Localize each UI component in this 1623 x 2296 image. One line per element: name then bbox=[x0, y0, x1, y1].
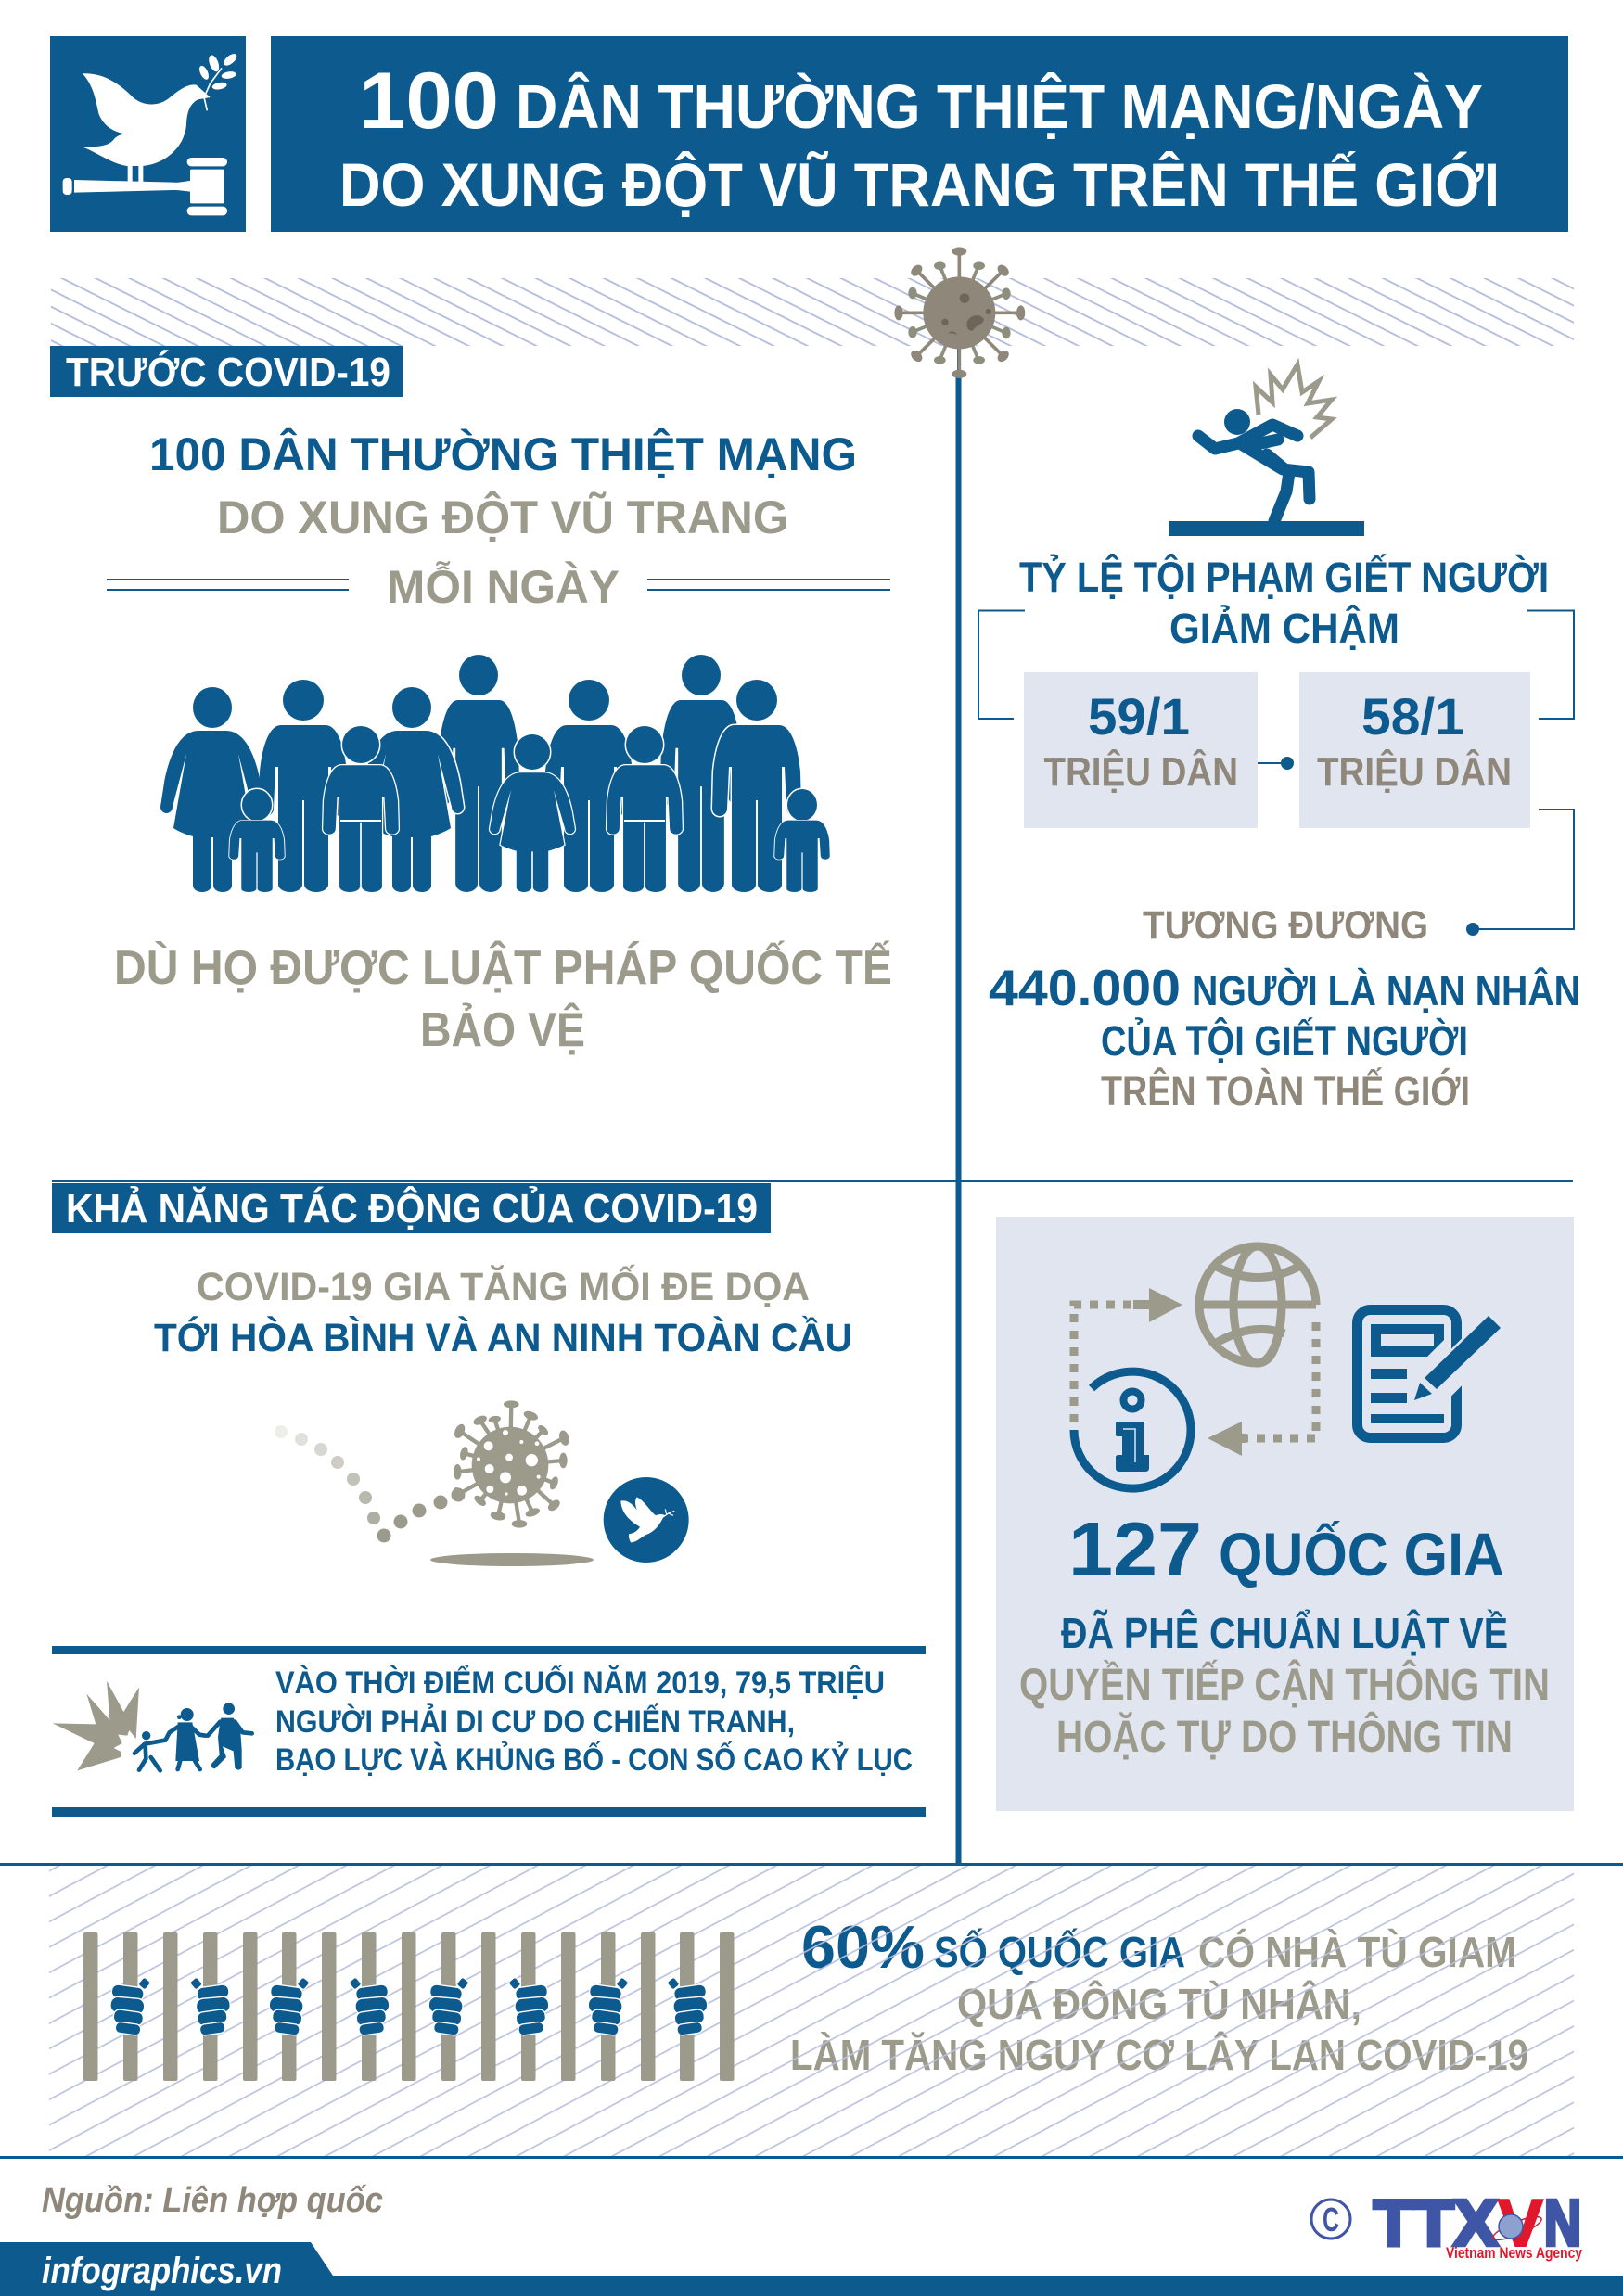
rule below prison band bbox=[0, 2156, 1623, 2159]
text: 440,000 victims bbox=[989, 903, 1580, 1115]
text: protected by international law: DÙ HỌ ĐƯỢC LUẬT PHÁP QUỐC TẾ bbox=[114, 940, 892, 995]
bracket lines bbox=[978, 610, 1574, 929]
text: 440,000 victims: 440.000 bbox=[989, 959, 1181, 1016]
stat box: 59/1: 59/1 bbox=[1088, 687, 1190, 746]
footer bar with website: infographics.vn bbox=[42, 2251, 282, 2291]
icon: person falling with impact burst bbox=[1169, 364, 1364, 536]
connector dots bbox=[1281, 757, 1479, 936]
stat box: 58/1: TRIỆU DÂN bbox=[1317, 748, 1512, 795]
bouncing dots trail bbox=[275, 1425, 466, 1543]
logo: TTXVN bbox=[1311, 2187, 1582, 2262]
logo: TTXVN: N bbox=[1544, 2187, 1581, 2259]
icon: coronavirus top bbox=[894, 247, 1025, 378]
headline: 100 civilians per day: DO XUNG ĐỘT VŨ TRANG bbox=[217, 491, 788, 543]
text: 60% of countries overcrowded prisons: CÓ NHÀ TÙ GIAM bbox=[1198, 1928, 1516, 1976]
text: 440,000 victims: TƯƠNG ĐƯƠNG bbox=[1143, 903, 1428, 948]
text: displaced people: BẠO LỰC VÀ KHỦNG BỐ - CON SỐ CAO KỶ LỤC bbox=[275, 1741, 913, 1778]
icon: prison bars bbox=[83, 1932, 735, 2081]
logo: TTXVN: C bbox=[1323, 2200, 1339, 2239]
hatched band: bottom bbox=[49, 1866, 1574, 2157]
text: protected by international law: BẢO VỆ bbox=[420, 1002, 585, 1057]
text: displaced people: NGƯỜI PHẢI DI CƯ DO CHIẾN TRANH, bbox=[275, 1704, 795, 1740]
section label: before Covid-19: TRƯỚC COVID-19 bbox=[66, 349, 390, 395]
text: 60% of countries overcrowded prisons: SỐ QUỐC GIA bbox=[934, 1928, 1185, 1976]
header icon: dove and gavel bbox=[50, 36, 246, 232]
icon: coronavirus ball bbox=[452, 1400, 570, 1528]
icon: dotted arrows bbox=[1074, 1288, 1316, 1456]
text: 127 countries: QUỐC GIA bbox=[1219, 1520, 1504, 1588]
text: Covid-19 threatens peace bbox=[154, 1264, 852, 1360]
title banner: DÂN THƯỜNG THIỆT MẠNG/NGÀY bbox=[516, 72, 1483, 142]
logo: TTXVN: TTX bbox=[1374, 2187, 1498, 2259]
headline: 100 civilians per day: MỖI NGÀY bbox=[387, 561, 620, 613]
text: displaced people bbox=[275, 1665, 913, 1778]
rule above prison band bbox=[0, 1863, 1623, 1866]
text: Covid-19 threatens peace: COVID-19 GIA TĂNG MỐI ĐE DỌA bbox=[197, 1264, 810, 1309]
headline: 100 civilians per day: 100 DÂN THƯỜNG THIỆT MẠNG bbox=[149, 428, 857, 480]
stat box: 59/1 bbox=[1024, 672, 1258, 828]
icon: explosion and fleeing family bbox=[53, 1681, 252, 1770]
horizontal section rule bbox=[52, 1180, 1573, 1182]
vertical divider bbox=[955, 343, 961, 1864]
title banner bbox=[271, 36, 1568, 232]
headline: 100 civilians per day bbox=[149, 428, 857, 613]
icon: info circle bbox=[1074, 1371, 1191, 1488]
text: 127 countries bbox=[1019, 1506, 1550, 1762]
icon: globe bbox=[1199, 1246, 1316, 1363]
icon: dove badge bbox=[604, 1477, 689, 1563]
heading: homicide rate bbox=[1019, 554, 1549, 652]
text: 60% of countries overcrowded prisons bbox=[790, 1913, 1528, 2079]
text: 440,000 victims: TRÊN TOÀN THẾ GIỚI bbox=[1101, 1067, 1470, 1115]
text: 60% of countries overcrowded prisons: 60% bbox=[801, 1913, 925, 1981]
icon: hands gripping bars bbox=[109, 1977, 708, 2036]
text: 60% of countries overcrowded prisons: LÀM TĂNG NGUY CƠ LÂY LAN COVID-19 bbox=[790, 2031, 1528, 2079]
title banner: 100 bbox=[359, 57, 499, 146]
text: Covid-19 threatens peace: TỚI HÒA BÌNH VÀ AN NINH TOÀN CẦU bbox=[154, 1315, 852, 1360]
callout: 79.5 million displaced bbox=[52, 1646, 926, 1817]
text: 127 countries: HOẶC TỰ DO THÔNG TIN bbox=[1056, 1711, 1513, 1762]
title banner: DO XUNG ĐỘT VŨ TRANG TRÊN THẾ GIỚI bbox=[339, 150, 1500, 219]
double rules beside text bbox=[107, 579, 890, 591]
stat box: 58/1: 58/1 bbox=[1361, 687, 1464, 746]
text: 127 countries: 127 bbox=[1068, 1506, 1202, 1592]
section label: Covid-19 impact: KHẢ NĂNG TÁC ĐỘNG CỦA COVID-19 bbox=[66, 1184, 758, 1231]
source line: Nguồn: Liên hợp quốc bbox=[42, 2181, 383, 2220]
text: 440,000 victims: CỦA TỘI GIẾT NGƯỜI bbox=[1101, 1017, 1468, 1065]
logo: TTXVN: Vietnam News Agency bbox=[1446, 2244, 1582, 2262]
shadow under virus bbox=[430, 1553, 594, 1566]
hatched band: top bbox=[51, 278, 1574, 346]
stat box: 58/1 bbox=[1299, 672, 1530, 828]
heading: homicide rate: TỶ LỆ TỘI PHẠM GIẾT NGƯỜI bbox=[1019, 554, 1549, 601]
text: displaced people: VÀO THỜI ĐIỂM CUỐI NĂM 2019, 79,5 TRIỆU bbox=[275, 1665, 885, 1701]
icon: crowd of civilians bbox=[160, 655, 830, 892]
icon: document and pen bbox=[1358, 1309, 1507, 1437]
stat box: 59/1: TRIỆU DÂN bbox=[1044, 748, 1238, 795]
heading: homicide rate: GIẢM CHẬM bbox=[1169, 605, 1399, 652]
text: protected by international law bbox=[114, 940, 892, 1057]
text: 127 countries: ĐÃ PHÊ CHUẨN LUẬT VỀ bbox=[1061, 1609, 1508, 1657]
footer bar with website bbox=[0, 2242, 1623, 2296]
panel: 127 countries bbox=[996, 1217, 1574, 1811]
text: 60% of countries overcrowded prisons: QUÁ ĐÔNG TÙ NHÂN, bbox=[957, 1980, 1361, 2028]
logo: TTXVN: V bbox=[1498, 2187, 1543, 2261]
